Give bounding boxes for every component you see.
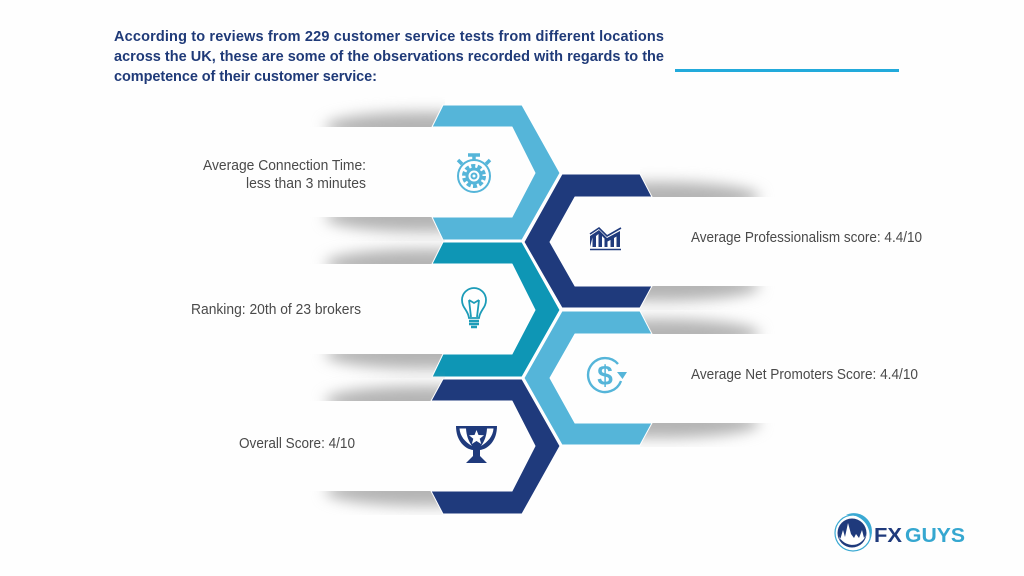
accent line	[675, 69, 899, 72]
panel: average connection time	[203, 105, 560, 240]
icon: dollar cycle	[588, 358, 627, 392]
label: connection time	[203, 158, 366, 192]
panel: ranking	[191, 242, 560, 377]
logo: FX Guys: FX	[874, 525, 903, 547]
label: net promoters: Average Net Promoters Score: 4.4/10	[691, 367, 918, 383]
icon: dollar cycle: $	[597, 360, 613, 391]
label: overall score: Overall Score: 4/10	[239, 436, 355, 452]
panel: overall score	[239, 379, 560, 514]
icon: bar chart	[590, 228, 621, 250]
logo: FX Guys: GUYS	[905, 525, 965, 547]
panel: net promoters score	[524, 311, 918, 445]
label: connection time: less than 3 minutes	[246, 176, 366, 192]
label: professionalism: Average Professionalism score: 4.4/10	[691, 230, 922, 246]
icon: stopwatch	[458, 155, 490, 192]
title: According to reviews from 229 customer service tests from different locations	[114, 29, 664, 45]
title: competence of their customer service:	[114, 69, 377, 85]
title: across the UK, these are some of the observations recorded with regards to the	[114, 49, 664, 65]
panel: professionalism score	[524, 174, 922, 308]
logo: FX Guys	[835, 513, 965, 551]
icon: trophy	[456, 426, 497, 463]
icon: light bulb	[462, 288, 486, 327]
label: connection time: Average Connection Time:	[203, 158, 366, 174]
logo emblem	[835, 513, 872, 551]
label: ranking: Ranking: 20th of 23 brokers	[191, 302, 361, 318]
title	[114, 29, 664, 85]
